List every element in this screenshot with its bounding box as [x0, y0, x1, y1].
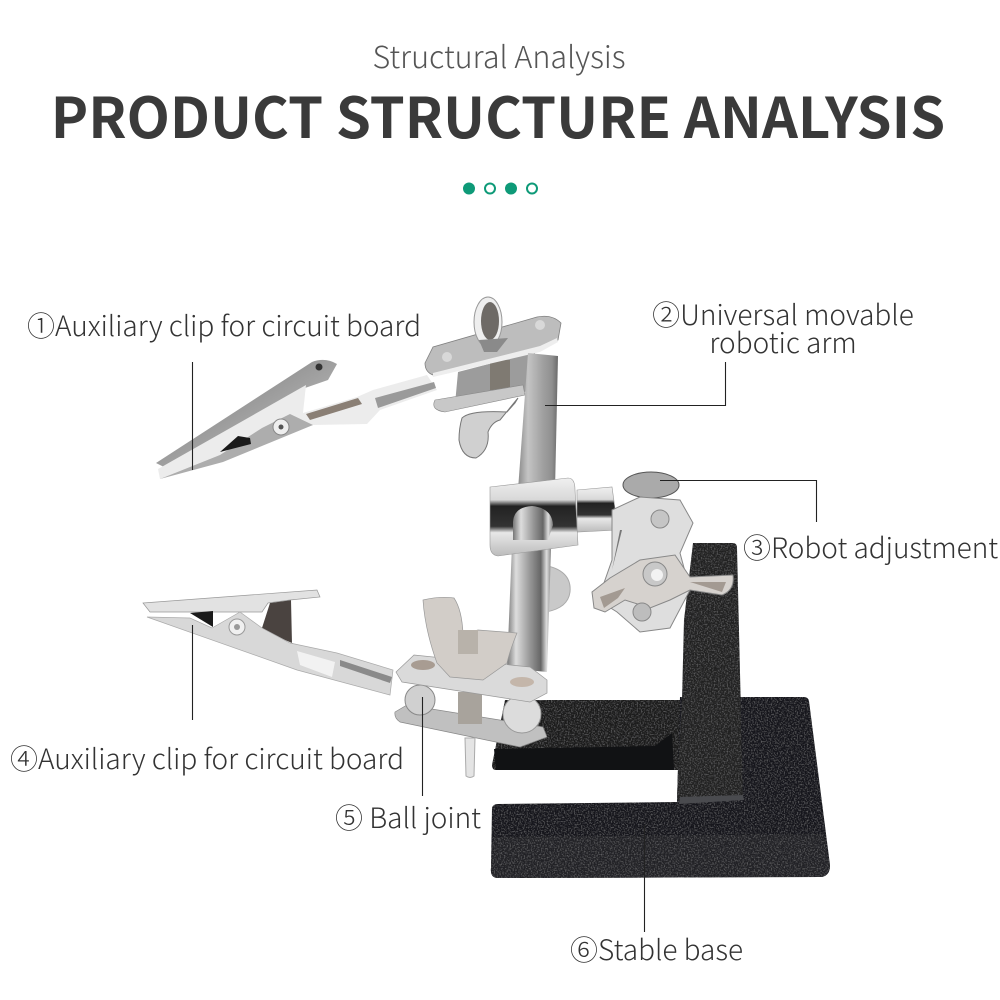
screw and pin: [458, 692, 482, 724]
clip body light: [158, 375, 437, 479]
dark slit: [220, 436, 251, 452]
ball joints: [405, 685, 435, 715]
title: PRODUCT STRUCTURE ANALYSIS: [51, 74, 945, 155]
back arm of base: [492, 700, 682, 770]
label 6: ⑥Stable base: [570, 929, 743, 969]
vertical arm rod upper: [518, 353, 558, 490]
lower plate: [395, 705, 547, 747]
label 5: ⑤ Ball joint: [335, 797, 481, 837]
label 1: ①Auxiliary clip for circuit board: [27, 305, 421, 345]
leader lines: [192, 362, 816, 932]
lower jaw shading: [160, 414, 313, 479]
half disc behind rod: [546, 566, 570, 612]
subtitle: Structural Analysis: [372, 33, 626, 77]
adjustment knob and wing nut: [592, 472, 733, 632]
cast iron base: [491, 543, 830, 878]
wing nut: [423, 597, 517, 680]
top plate: [396, 655, 547, 702]
front L plate: [491, 697, 830, 878]
middle joint: [490, 478, 618, 556]
top alligator clip: [156, 360, 437, 479]
label 2: [652, 294, 914, 362]
label 2: robotic arm: [709, 322, 857, 362]
upper jaw: [156, 360, 337, 468]
bottom clamp assembly: [395, 597, 547, 778]
decorative dots: [463, 182, 538, 194]
top clamp assembly: [425, 297, 561, 458]
label 2: ②Universal movable: [652, 294, 914, 334]
label 4: ④Auxiliary clip for circuit board: [10, 738, 404, 778]
bottom alligator clip: [143, 590, 393, 695]
vertical arm rod lower: [507, 520, 552, 672]
label 3: ③Robot adjustment: [743, 527, 998, 567]
upright: [677, 543, 743, 800]
